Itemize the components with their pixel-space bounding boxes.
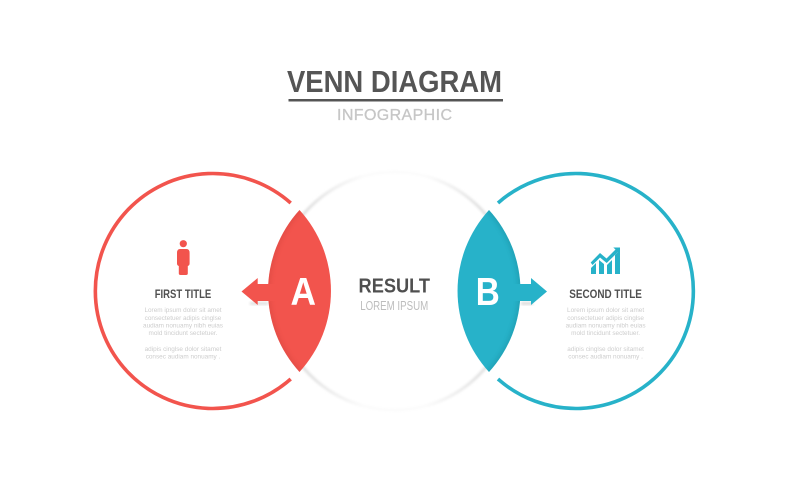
first body text: consectetuer adipis cinglse — [145, 315, 222, 322]
right circle outline — [498, 174, 693, 408]
icon: growth chart — [591, 248, 620, 274]
second body text: adipis cinglse dolor sitamet — [567, 346, 644, 353]
first body text: audiam nonuamy nibh euias — [143, 322, 223, 330]
icon: person — [177, 240, 190, 275]
title: VENN DIAGRAM — [287, 64, 502, 99]
right lens — [458, 210, 520, 372]
center circle — [276, 172, 514, 410]
left circle outline — [95, 174, 291, 408]
first body text: Lorem ipsum dolor sit amet — [144, 307, 222, 314]
arrow left — [242, 278, 280, 305]
center result text: LOREM IPSUM — [360, 299, 428, 313]
second body text: audiam nonuamy nibh euias — [566, 322, 646, 330]
second body text — [566, 307, 646, 360]
second body text: consectetuer adipis cinglse — [567, 315, 644, 322]
letter B: B — [476, 271, 500, 314]
second body text: consec audiam nonuamy . — [568, 354, 643, 360]
center result text: RESULT — [359, 276, 430, 298]
center result text — [359, 276, 430, 313]
left lens — [268, 210, 331, 372]
letter A: A — [291, 271, 316, 314]
second title: SECOND TITLE — [569, 289, 642, 301]
arrow right — [508, 278, 547, 305]
first body text: adipis cinglse dolor sitamet — [145, 346, 222, 353]
first body text: consec audiam nonuamy . — [146, 354, 221, 360]
second body text: mold tincidunt sectetuer. — [571, 330, 640, 337]
first title: FIRST TITLE — [155, 289, 212, 301]
first body text: mold tincidunt sectetuer. — [149, 330, 218, 337]
second body text: Lorem ipsum dolor sit amet — [567, 307, 644, 314]
subtitle: INFOGRAPHIC — [337, 107, 452, 124]
first body text — [143, 307, 223, 360]
